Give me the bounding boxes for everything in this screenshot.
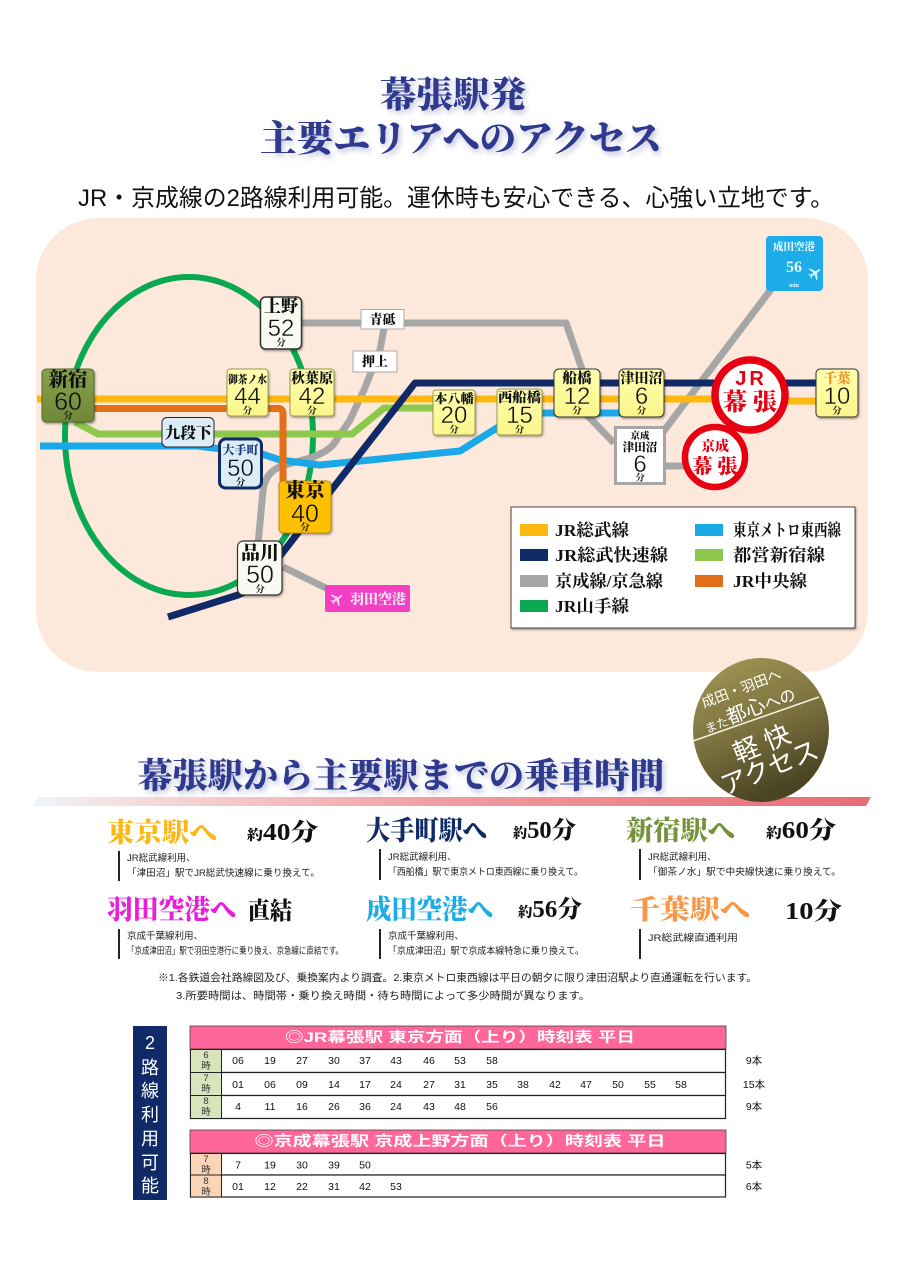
row: 7 o'clock: 17	[359, 1079, 371, 1091]
airport: Narita: 56	[786, 259, 802, 276]
station: Akihabara: 秋葉原	[291, 370, 334, 387]
legend: 都営新宿線	[733, 545, 825, 565]
train counts: 5本	[746, 1158, 763, 1172]
side label: 用	[141, 1129, 159, 1149]
destination: Haneda: 京成千葉線利用、	[127, 930, 203, 942]
destination: Shinjuku: 約60分	[766, 817, 836, 844]
section bar	[33, 797, 871, 806]
station: Motoyawata: 分	[449, 424, 459, 436]
timetable: JR Makuhari: 6	[203, 1050, 209, 1061]
row: 8 o'clock: 31	[328, 1181, 340, 1193]
row: 8 o'clock: 24	[390, 1101, 402, 1113]
legend: JR山手線	[555, 597, 629, 616]
station: Chiba: 10	[824, 383, 850, 410]
row: 8 o'clock: 4	[235, 1101, 241, 1113]
row: 8 o'clock: 11	[265, 1101, 276, 1113]
map background	[36, 218, 868, 672]
row: 6 o'clock: 53	[454, 1055, 466, 1067]
station: Keisei Tsudanuma: 津田沼	[623, 440, 658, 454]
badge: 軽 快	[729, 719, 795, 769]
row: 7 o'clock: 55	[644, 1079, 656, 1091]
title	[260, 75, 662, 159]
destination: Narita: 約56分	[518, 896, 582, 923]
line: Keisei / Keikyu	[258, 288, 772, 591]
row: 7 o'clock: 50	[359, 1160, 371, 1172]
row: 7 o'clock: 50	[612, 1079, 624, 1091]
destination: Chiba: 10分	[785, 898, 842, 925]
station: Ochanomizu: 44	[234, 383, 261, 410]
timetable: JR Makuhari: ◎JR幕張駅 東京方面（上り）時刻表 平日	[285, 1029, 635, 1045]
line: JR Sobu Rapid	[168, 383, 820, 617]
timetable: Keisei Makuhari: 8	[203, 1176, 209, 1187]
station: Shinjuku	[42, 368, 94, 422]
station: JR Makuhari	[715, 360, 785, 430]
side label: 路	[141, 1058, 159, 1078]
legend: 京成線/京急線	[555, 572, 663, 591]
timetable: JR Makuhari	[190, 1026, 766, 1118]
station: Nishi-Funabashi: 西船橋	[498, 389, 542, 405]
station: Keisei Tsudanuma: 6	[633, 451, 647, 478]
legend: 東京メトロ東西線	[733, 521, 841, 540]
station: JR Makuhari: 幕 張	[723, 389, 777, 416]
station: Keisei Tsudanuma: 京成	[630, 430, 650, 442]
destination: Shinjuku: 「御茶ノ水」駅で中央線快速に乗り換えて。	[648, 866, 841, 878]
footnotes: ※1.各鉄道会社路線図及び、乗換案内より調査。2.東京メトロ東西線は平日の朝夕に限り津田沼駅より直通運転を行います。	[158, 971, 757, 984]
side label: 2	[145, 1033, 155, 1053]
station: Shinjuku: 60	[54, 388, 82, 416]
row: 7 o'clock: 19	[264, 1160, 276, 1172]
badge: アクセス	[716, 735, 823, 801]
station: Keisei Tsudanuma: 分	[635, 472, 645, 484]
line: Tokyo Metro Tozai	[40, 413, 622, 465]
timetable: Keisei Makuhari: ◎京成幕張駅 京成上野方面（上り）時刻表 平日	[254, 1133, 666, 1149]
airport: Narita: 成田空港	[773, 240, 815, 253]
timetable: JR Makuhari: 時	[201, 1061, 211, 1072]
station: Kudanshita: 九段下	[165, 423, 213, 442]
destination: Tokyo: JR総武線利用、	[127, 852, 196, 864]
timetable: JR Makuhari: 時	[201, 1084, 211, 1095]
station: Motoyawata: 本八幡	[434, 391, 475, 406]
station: Ochanomizu: 分	[243, 405, 253, 417]
station: Ueno: 上野	[264, 297, 298, 316]
row: 7 o'clock: 31	[454, 1079, 466, 1091]
destination: Tokyo: 東京駅へ	[107, 818, 217, 848]
timetable: Keisei Makuhari	[190, 1130, 763, 1198]
row: 8 o'clock: 26	[328, 1101, 340, 1113]
station: Chiba: 分	[832, 405, 842, 417]
station: Ueno	[260, 297, 302, 349]
timetable: Keisei Makuhari: 時	[201, 1165, 211, 1176]
row: 8 o'clock: 53	[390, 1181, 402, 1193]
station: Tokyo: 40	[291, 500, 319, 528]
badge	[693, 658, 829, 802]
destination: Tokyo: 約40分	[247, 819, 318, 846]
station: Chiba: 千葉	[824, 370, 851, 386]
destination: Chiba: JR総武線直通利用	[648, 932, 738, 944]
station: Motoyawata	[433, 390, 475, 436]
legend: JR中央線	[733, 572, 807, 591]
footnotes	[158, 971, 757, 1002]
train counts: 15本	[743, 1078, 766, 1091]
destination: Narita	[366, 895, 584, 959]
line: Toei Shinjuku	[75, 408, 440, 434]
row: 6 o'clock: 43	[390, 1055, 402, 1067]
row: 6 o'clock: 37	[359, 1055, 371, 1067]
row: 7 o'clock: 47	[580, 1079, 592, 1091]
airport: Narita: min	[789, 283, 800, 289]
station: Ochanomizu	[227, 369, 268, 417]
destination: Haneda: 「京成津田沼」駅で羽田空港行に乗り換え、京急線に直結です。	[127, 945, 343, 957]
station: Shinagawa	[238, 541, 282, 596]
destination: Shinjuku	[626, 816, 841, 880]
destination: Shinjuku: 新宿駅へ	[626, 816, 735, 846]
station: Otemachi	[220, 439, 262, 488]
row: 8 o'clock: 12	[264, 1181, 276, 1193]
station: Otemachi: 大手町	[222, 442, 259, 457]
side label	[133, 1026, 167, 1200]
station: Funabashi: 12	[564, 383, 590, 410]
station: Tsudanuma: 6	[635, 383, 648, 410]
row: 8 o'clock: 16	[296, 1101, 308, 1113]
row: 7 o'clock: 01	[232, 1079, 244, 1091]
station: Nishi-Funabashi: 15	[506, 402, 533, 429]
row: 7 o'clock: 35	[486, 1079, 498, 1091]
station: Tokyo	[279, 479, 331, 534]
legend: JR総武線	[555, 521, 629, 540]
timetable: Keisei Makuhari: 時	[201, 1187, 211, 1198]
destination: Chiba	[630, 895, 842, 959]
station: Motoyawata: 20	[441, 402, 467, 429]
station: Ochanomizu: 御茶ノ水	[228, 372, 267, 386]
row: 7 o'clock: 06	[264, 1079, 276, 1091]
row: 6 o'clock: 27	[296, 1055, 308, 1067]
destination: Tokyo	[107, 818, 320, 881]
destination: Haneda: 直結	[248, 898, 292, 925]
row: 8 o'clock: 43	[423, 1101, 435, 1113]
row: 8 o'clock: 42	[359, 1181, 371, 1193]
airport: Haneda	[325, 585, 410, 612]
station: Shinagawa: 分	[255, 584, 265, 596]
row: 7 o'clock: 14	[328, 1079, 340, 1091]
airport: Narita	[766, 236, 824, 291]
row: 6 o'clock: 06	[232, 1055, 244, 1067]
destination: Narita: 「京成津田沼」駅で京成本線特急に乗り換えて。	[388, 945, 584, 957]
section heading: 幕張駅から主要駅までの乗車時間	[138, 756, 664, 796]
side label: 利	[141, 1105, 159, 1125]
station: Aoto: 青砥	[369, 312, 396, 327]
station: Oshiage: 押上	[362, 354, 388, 369]
row: 7 o'clock: 24	[390, 1079, 402, 1091]
station: Akihabara	[290, 369, 334, 417]
station: Oshiage	[353, 351, 397, 372]
row: 7 o'clock: 27	[423, 1079, 435, 1091]
title: 幕張駅発	[380, 75, 526, 115]
side label: 可	[141, 1153, 159, 1173]
row: 8 o'clock: 01	[232, 1181, 244, 1193]
station: Tokyo: 分	[300, 522, 310, 534]
station: Tsudanuma: 分	[637, 405, 647, 417]
badge: 成田・羽田へ	[699, 666, 783, 711]
destination: Narita: 京成千葉線利用、	[388, 930, 464, 942]
station: Shinjuku: 分	[63, 410, 73, 422]
destination: Haneda	[107, 895, 343, 959]
station: Otemachi: 50	[227, 455, 254, 482]
line: JR Sobu	[37, 399, 820, 401]
station: Keisei Makuhari: 京成	[701, 438, 729, 455]
train counts: 9本	[746, 1100, 763, 1113]
station: Nishi-Funabashi	[497, 389, 542, 436]
station: Keisei Makuhari: 幕 張	[692, 455, 738, 478]
train counts: 6本	[746, 1180, 763, 1193]
station: Aoto	[361, 310, 404, 329]
side label: 線	[141, 1081, 159, 1101]
timetable: JR Makuhari: 時	[201, 1107, 211, 1118]
station: Shinagawa: 品川	[241, 542, 279, 564]
destination: Otemachi: 「西船橋」駅で東京メトロ東西線に乗り換えて。	[388, 866, 583, 878]
destination: Shinjuku: JR総武線利用、	[648, 851, 717, 863]
airport: Haneda: 羽田空港	[350, 591, 406, 608]
station: Ueno: 分	[276, 337, 286, 349]
destination: Otemachi: JR総武線利用、	[388, 851, 457, 863]
subtitle: JR・京成線の2路線利用可能。運休時も安心できる、心強い立地です。	[78, 185, 834, 212]
station: Tsudanuma	[619, 369, 664, 417]
timetable: JR Makuhari: 7	[203, 1073, 209, 1084]
station: Funabashi: 船橋	[562, 369, 592, 387]
line: JR Chuo	[92, 408, 283, 484]
title: 主要エリアへのアクセス	[260, 118, 662, 159]
station: Keisei Tsudanuma	[616, 428, 664, 484]
timetable: Keisei Makuhari: 7	[203, 1154, 209, 1165]
legend: JR総武快速線	[555, 545, 668, 565]
footnotes: 3.所要時間は、時間帯・乗り換え時間・待ち時間によって多少時間が異なります。	[176, 989, 590, 1002]
row: 8 o'clock: 36	[359, 1101, 371, 1113]
row: 6 o'clock: 58	[486, 1055, 498, 1067]
icon: plane	[328, 590, 346, 608]
train counts: 9本	[746, 1054, 763, 1067]
station: Funabashi	[554, 369, 600, 417]
badge: また都心への	[701, 682, 799, 738]
station: Funabashi: 分	[572, 405, 582, 417]
station: Tsudanuma: 津田沼	[620, 370, 662, 387]
station: Akihabara: 42	[299, 383, 325, 410]
station: Keisei Makuhari	[685, 427, 745, 487]
side label: 能	[141, 1176, 159, 1196]
destination: Haneda: 羽田空港へ	[107, 895, 236, 925]
station: Otemachi: 分	[236, 476, 246, 488]
timetable: JR Makuhari: 8	[203, 1096, 209, 1107]
station: JR Makuhari: JR	[735, 368, 767, 390]
row: 7 o'clock: 30	[296, 1160, 308, 1172]
destination: Narita: 成田空港へ	[366, 895, 493, 925]
station: Akihabara: 分	[307, 405, 317, 417]
station: Tokyo: 東京	[285, 479, 326, 502]
station: Kudanshita	[162, 418, 214, 447]
destination: Otemachi: 約50分	[513, 817, 576, 844]
row: 7 o'clock: 39	[328, 1160, 340, 1172]
station: Nishi-Funabashi: 分	[515, 424, 525, 436]
destination: Tokyo: 「津田沼」駅でJR総武快速線に乗り換えて。	[127, 867, 320, 879]
row: 7 o'clock: 7	[235, 1160, 241, 1172]
destination: Otemachi	[366, 816, 583, 880]
row: 6 o'clock: 30	[328, 1055, 340, 1067]
station: Ueno: 52	[268, 315, 294, 342]
panel: route map	[36, 218, 868, 672]
destination: Otemachi: 大手町駅へ	[366, 816, 487, 846]
station: Chiba	[816, 369, 858, 417]
icon: plane	[806, 264, 824, 282]
row: 7 o'clock: 38	[517, 1079, 529, 1091]
row: 8 o'clock: 22	[296, 1181, 308, 1193]
destination: Chiba: 千葉駅へ	[630, 895, 750, 925]
station: Shinagawa: 50	[246, 561, 274, 589]
row: 7 o'clock: 58	[675, 1079, 687, 1091]
row: 7 o'clock: 42	[549, 1079, 561, 1091]
row: 8 o'clock: 56	[486, 1101, 498, 1113]
row: 8 o'clock: 48	[454, 1101, 466, 1113]
row: 6 o'clock: 19	[264, 1055, 276, 1067]
row: 6 o'clock: 46	[423, 1055, 435, 1067]
line: JR Yamanote	[65, 277, 313, 595]
legend	[511, 507, 855, 628]
row: 7 o'clock: 09	[296, 1079, 308, 1091]
station: Shinjuku: 新宿	[48, 368, 88, 391]
